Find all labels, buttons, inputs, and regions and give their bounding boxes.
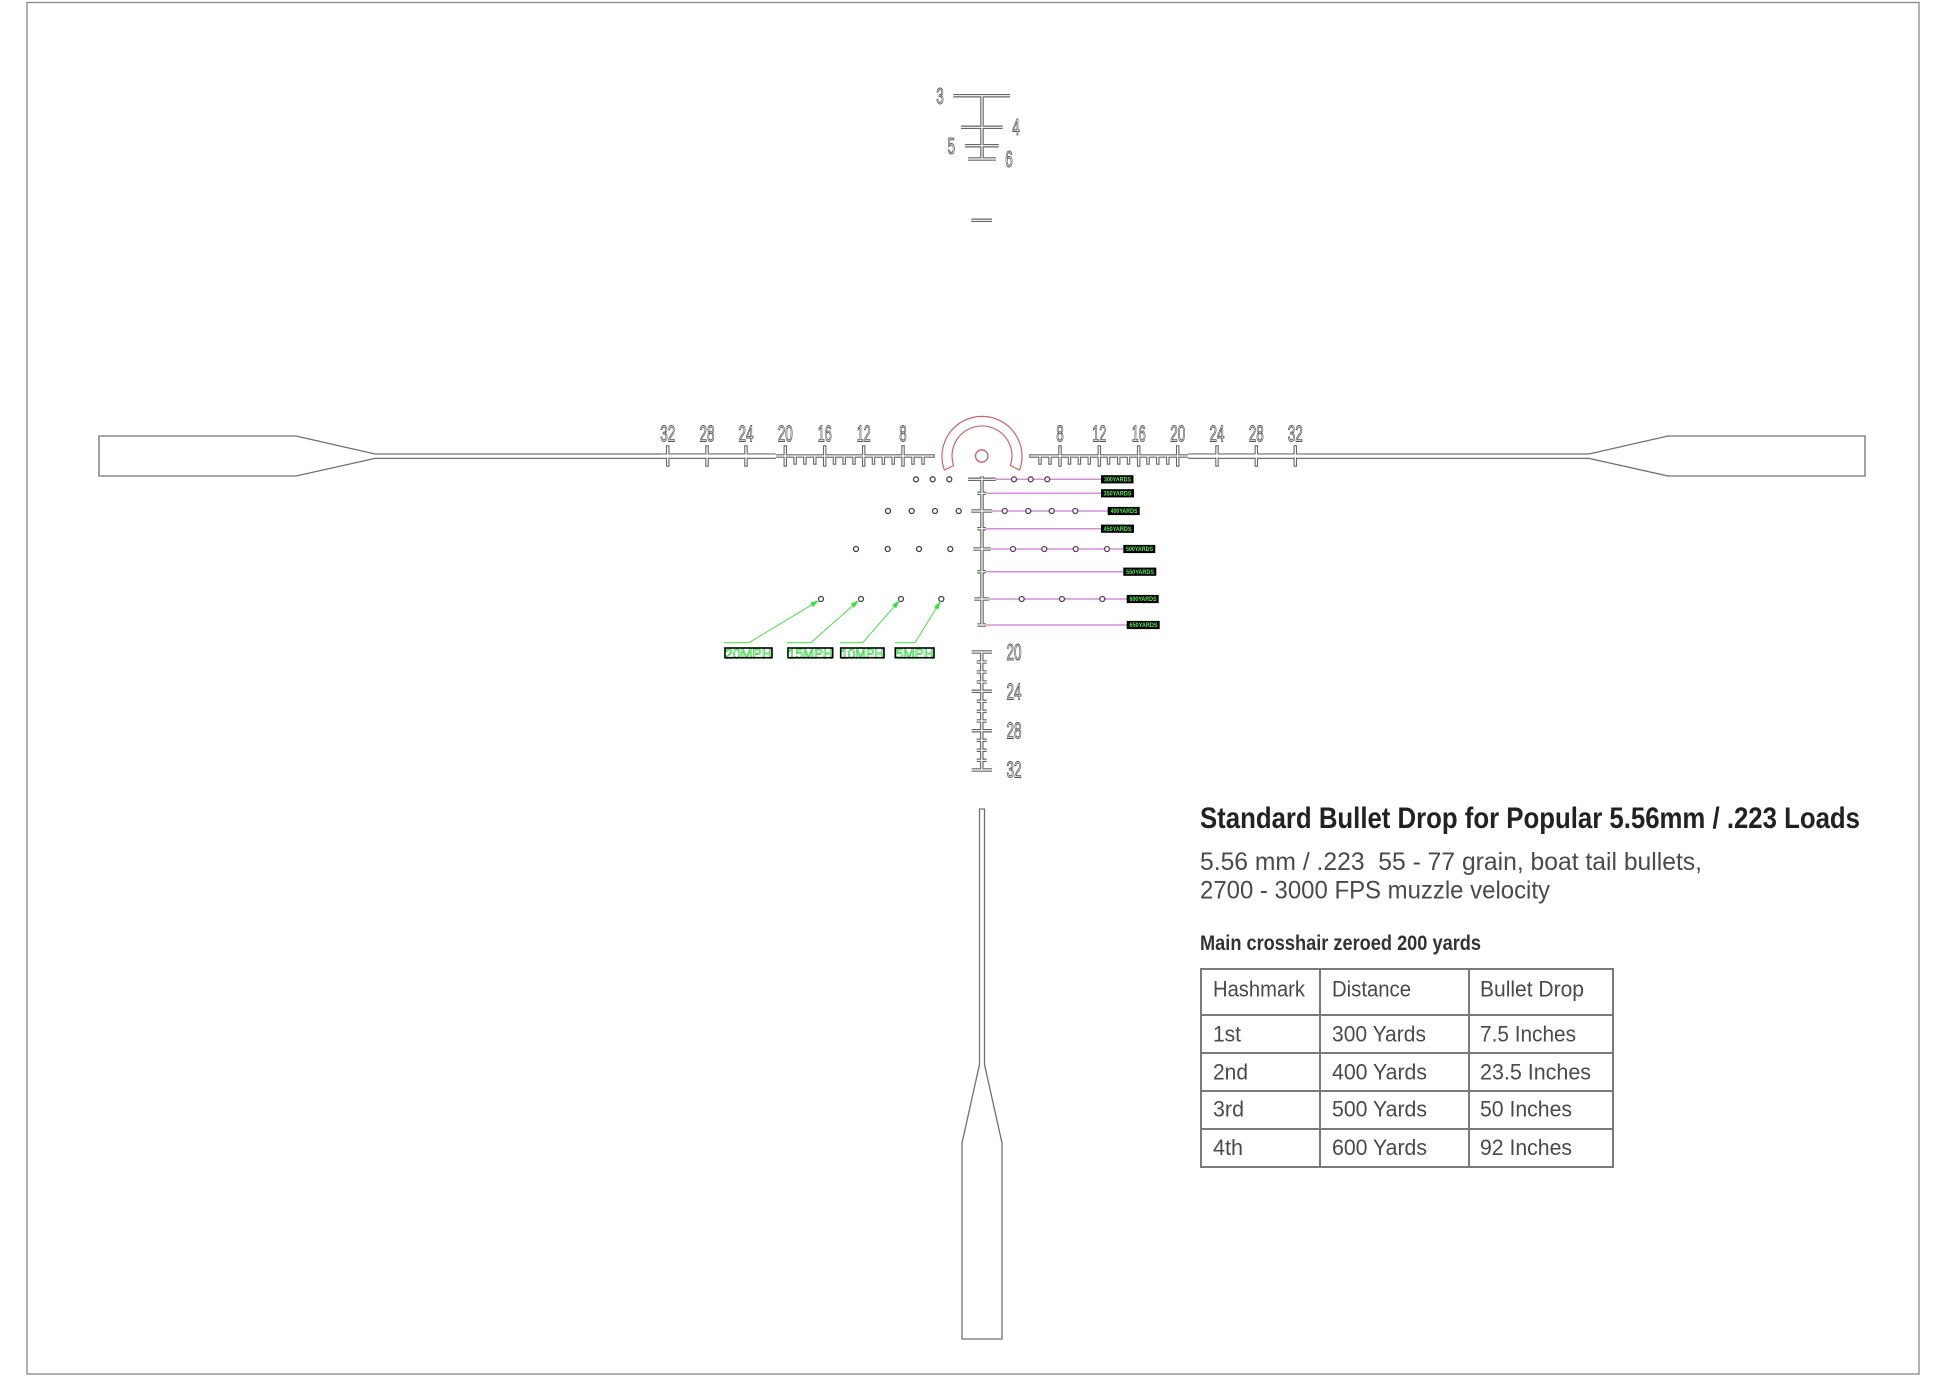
right scale numbers [1056, 421, 1303, 447]
table header: Distance [1332, 976, 1411, 1002]
left scale numbers: 8 [899, 421, 907, 447]
table rows: 50 Inches [1480, 1096, 1572, 1122]
yardage labels [1101, 475, 1160, 629]
right scale numbers: 16 [1132, 421, 1146, 447]
table rows: 2nd [1213, 1060, 1248, 1084]
left scale numbers: 20 [778, 421, 793, 447]
lower ladder numbers: 32 [1006, 757, 1022, 783]
load description: 5.56 mm / .223 55 - 77 grain, boat tail bullets, [1200, 848, 1702, 876]
right horizontal crosshair wing [1189, 436, 1865, 476]
right wind dots [1002, 477, 1110, 602]
table header: Bullet Drop [1480, 976, 1584, 1002]
table rows: 3rd [1213, 1096, 1244, 1122]
title: Standard Bullet Drop for Popular 5.56mm / .223 Loads [1200, 802, 1860, 835]
yardage labels: 650YARDS [1130, 623, 1158, 629]
top ladder numbers [936, 83, 1020, 172]
wind speed labels: 15MPH [788, 646, 833, 662]
top ladder numbers: 3 [936, 83, 944, 109]
left horizontal crosshair wing [99, 436, 775, 476]
table header: Hashmark [1213, 976, 1306, 1002]
green wind speed arrows [724, 601, 940, 643]
top ladder numbers: 6 [1005, 146, 1013, 172]
red horseshoe with centre dot [942, 416, 1022, 470]
bottom vertical crosshair post [962, 809, 1002, 1339]
right scale numbers: 8 [1056, 421, 1064, 447]
left scale numbers: 24 [738, 421, 754, 447]
right scale numbers: 28 [1249, 421, 1264, 447]
lower ladder numbers [1006, 639, 1022, 783]
load description: 2700 - 3000 FPS muzzle velocity [1200, 876, 1550, 904]
zero note: Main crosshair zeroed 200 yards [1200, 932, 1481, 955]
table rows: 1st [1213, 1022, 1241, 1046]
yardage labels: 600YARDS [1130, 597, 1156, 603]
yardage labels: 550YARDS [1126, 570, 1154, 576]
table rows [1213, 1022, 1591, 1160]
left wind dots [818, 477, 961, 602]
table rows: 500 Yards [1332, 1096, 1427, 1122]
table rows: 23.5 Inches [1480, 1060, 1591, 1084]
right scale numbers: 20 [1170, 421, 1185, 447]
right scale numbers: 24 [1210, 421, 1225, 447]
table header [1213, 976, 1584, 1002]
left scale numbers: 32 [660, 421, 675, 447]
top ladder numbers: 4 [1012, 114, 1020, 140]
left scale numbers: 12 [857, 421, 871, 447]
yardage labels: 450YARDS [1104, 527, 1132, 533]
left scale numbers: 16 [818, 421, 832, 447]
top ladder numbers: 5 [948, 133, 955, 159]
right scale numbers: 32 [1288, 421, 1303, 447]
table rows: 400 Yards [1332, 1060, 1427, 1084]
lower range ladder [972, 652, 992, 770]
lower ladder numbers: 28 [1006, 718, 1022, 744]
yardage labels: 500YARDS [1126, 547, 1153, 553]
right scale numbers: 12 [1092, 421, 1106, 447]
bullet drop table [1201, 969, 1613, 1167]
lower ladder numbers: 20 [1006, 639, 1022, 665]
horizontal mil scale [660, 447, 1304, 465]
table rows: 300 Yards [1332, 1022, 1426, 1046]
wind speed labels: 5MPH [895, 646, 934, 662]
yardage labels: 350YARDS [1104, 491, 1132, 497]
table rows: 600 Yards [1332, 1135, 1427, 1160]
table rows: 92 Inches [1480, 1135, 1572, 1160]
table rows: 4th [1213, 1135, 1243, 1160]
wind speed labels [725, 646, 934, 662]
load description [1200, 848, 1702, 904]
wind speed labels: 20MPH [725, 646, 772, 662]
left scale numbers [660, 421, 907, 447]
yardage labels: 400YARDS [1110, 509, 1138, 515]
top range ladder [953, 96, 1010, 220]
table rows: 7.5 Inches [1480, 1022, 1576, 1046]
yardage labels: 300YARDS [1104, 477, 1131, 483]
wind speed labels: 10MPH [841, 646, 884, 662]
lower ladder numbers: 24 [1006, 678, 1022, 704]
bullet drop post and hashmarks [968, 476, 996, 625]
magenta yardage leader lines [986, 479, 1127, 625]
left scale numbers: 28 [700, 421, 714, 447]
